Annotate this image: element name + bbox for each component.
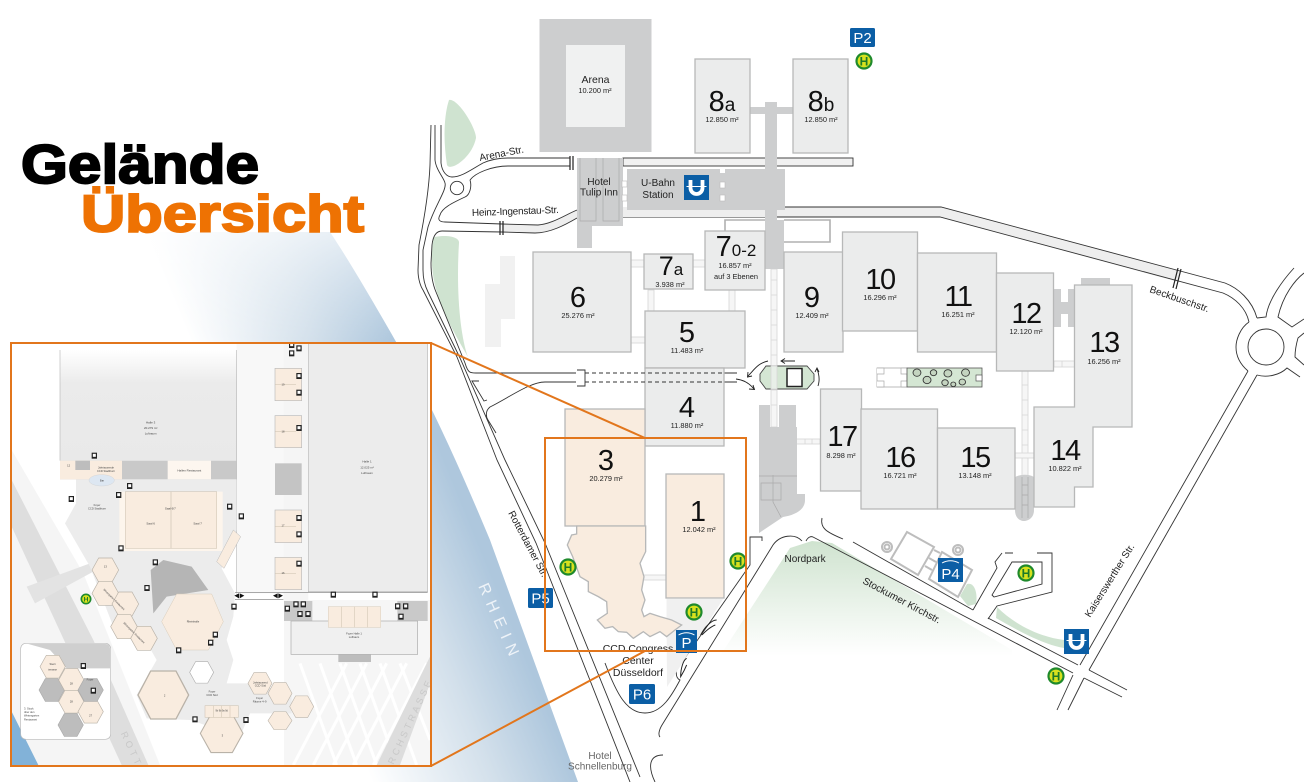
- inset: bus stop: [81, 594, 91, 604]
- west roundabout: [450, 181, 464, 195]
- horizontal connector 8a 8b: [750, 107, 793, 114]
- title line: Übersicht: Übersicht: [81, 186, 364, 244]
- hall 13 and 14: 13: [1089, 327, 1119, 359]
- roundabout plaza with arrows: [736, 358, 819, 390]
- inset: upper floor box: [21, 643, 111, 739]
- hall 7a: [644, 251, 693, 289]
- bus stop icons: [560, 54, 1064, 684]
- hall 17: [820, 389, 862, 491]
- gray parking frame P4: [882, 532, 972, 597]
- river label: RHEIN: [474, 581, 524, 665]
- inset: hall 1: [308, 343, 428, 592]
- inset: Saal 6 and 7: Saal 6/7: [165, 506, 176, 510]
- U-Bahn station block: [627, 169, 785, 210]
- inset: seminar labels: CCD Süd: [255, 684, 266, 688]
- south loop: [605, 537, 762, 713]
- hall 6: [533, 252, 631, 352]
- caption CCD Congress Center: Center: [622, 655, 654, 667]
- inset: hall 3: [60, 350, 237, 593]
- inset: side modules of hall 1: [275, 368, 302, 590]
- parking sign garage: P: [681, 635, 692, 652]
- park Nordpark: [720, 541, 1012, 656]
- inset: upper floor box: Restaurant: [24, 717, 37, 721]
- road break marks: [500, 156, 1181, 289]
- Stockumer lines: [806, 537, 1073, 673]
- hall 4: 4: [679, 392, 695, 424]
- hall 8a: 12.850 m²: [705, 115, 739, 124]
- inset: corridor: [234, 592, 428, 599]
- inset: small seminar row: [217, 530, 241, 568]
- hall 1: 1: [690, 496, 706, 528]
- Arena-Str lines: [441, 125, 570, 177]
- inset: side modules of hall 1: 16: [282, 571, 285, 575]
- inset: seminar labels: Wintergarten Restaurant: [122, 621, 146, 644]
- street labels: [472, 145, 1210, 772]
- inset: restaurant strip: CCD Stadthorn: [97, 469, 116, 473]
- hall 17: 17: [827, 421, 857, 453]
- connector 12 13: [1054, 289, 1075, 327]
- inset: upper floor box: terasse: [48, 668, 58, 672]
- hall 8a: [695, 59, 750, 153]
- inset: foyer hall 1: [284, 601, 428, 662]
- inset: hall 1: Halle 1: [362, 459, 372, 463]
- callout frame around congress center: [545, 438, 746, 651]
- hall 7 0-2: 16.857 m²: [718, 261, 752, 270]
- dashed tunnel lines: [585, 373, 723, 382]
- gray hub and connector structures: [577, 102, 1110, 533]
- hall 11: 11: [944, 281, 972, 313]
- label Rotterdamer Str: Rotterdamer Str.: [505, 509, 550, 579]
- inset: hall 1: Luftraum: [361, 471, 373, 475]
- inset: side modules of hall 1: 18: [282, 430, 285, 434]
- hall 10: 10: [865, 264, 895, 296]
- hall Arena: Arena: [581, 74, 610, 86]
- Kaiserswerther lines: [1080, 371, 1248, 665]
- station caption: U-Bahn: [641, 178, 675, 189]
- hall 8b: [793, 59, 848, 153]
- inset: hall 3: Luftraum: [145, 432, 157, 436]
- hall 15: 15: [960, 442, 990, 474]
- hall 7a: 7a: [659, 251, 684, 281]
- inset: upper floor box: 28: [70, 682, 73, 686]
- inset: upper floor box: 28: [70, 700, 73, 704]
- hall 9: [784, 252, 843, 352]
- inset: restaurant strip: [60, 461, 237, 479]
- east roundabout: [1248, 329, 1284, 365]
- parking sign P2: P2: [853, 30, 872, 47]
- inset: seminar labels: Foyer: [256, 697, 263, 700]
- inset: upper floor box: 3. Stock: [24, 706, 34, 710]
- label Arena-Str: Arena-Str.: [478, 145, 525, 164]
- hotel caption: Tulip Inn: [580, 188, 618, 198]
- hall 7 0-2: auf 3 Ebenen: [714, 272, 758, 281]
- parking sign P5: [528, 588, 553, 608]
- parking sign garage: [676, 630, 697, 653]
- garage arrows: [681, 620, 717, 677]
- hall 8b: 12.850 m²: [804, 115, 838, 124]
- hall 8b: 8b: [808, 86, 834, 118]
- hall 3: 20.279 m²: [589, 474, 623, 483]
- hall 9: 12.409 m²: [795, 311, 829, 320]
- inset: foyer label: CCD Stadthorn: [88, 506, 107, 510]
- inset: seminar labels: [102, 564, 268, 738]
- label Beckbuschstr: Beckbuschstr.: [1148, 284, 1210, 315]
- label Heinz-Ingenstau-Str: Heinz-Ingenstau-Str.: [472, 205, 559, 219]
- hall 10: 16.296 m²: [863, 293, 897, 302]
- Heinz-Ingenstau lower line: [431, 218, 577, 373]
- parking sign P2: [850, 28, 875, 47]
- hall 16: 16: [885, 442, 915, 474]
- inset: auditorium: Rheinhalle: [187, 620, 200, 624]
- inset: restaurant strip: Hallen Restaurant: [177, 468, 201, 472]
- inset: upper floor box: Stern: [49, 662, 56, 666]
- hall 3: [565, 409, 645, 526]
- inset: seminar labels: Foyer: [209, 691, 215, 694]
- icon: U-Bahn Kaiserswerther: [1064, 629, 1089, 654]
- hall 7a: 3.938 m²: [655, 280, 685, 289]
- south entrance block: [759, 405, 805, 533]
- title: [21, 133, 364, 244]
- road network: [418, 125, 1304, 782]
- inset: side modules of hall 1: 17: [282, 524, 285, 528]
- inset: hall 3: Halle 3: [146, 420, 156, 424]
- hall 13 and 14: 10.822 m²: [1048, 464, 1082, 473]
- inset: seminar labels: Wintergarten Restaurant: [102, 588, 126, 611]
- inset: foyer hall 1: Foyer Halle 1: [346, 633, 362, 636]
- bus stop icons: H: [860, 54, 868, 68]
- inset: seminar hexagons: [92, 558, 314, 753]
- top bump hall 13: [1081, 278, 1110, 286]
- parking sign P4: P4: [941, 566, 960, 583]
- inset: rooms row: [205, 706, 238, 717]
- inset: upper floor box: Wintergarten: [24, 714, 40, 718]
- hall 10: [842, 232, 918, 331]
- inset: seminar labels: Räume 4–9: [253, 699, 267, 703]
- inset: foyer floor: [65, 479, 292, 737]
- inset: hall 1: 12.025 m²: [360, 465, 374, 469]
- hall 5: [645, 311, 745, 368]
- bus stop icons: H: [690, 605, 698, 619]
- parking sign P6: P6: [633, 686, 651, 704]
- label Kaiserswerther Str: Kaiserswerther Str.: [1083, 542, 1137, 620]
- bus stop icons: H: [564, 560, 572, 574]
- hall 13 and 14: 14: [1050, 435, 1081, 467]
- hall 11: 16.251 m²: [941, 310, 975, 319]
- road Heinz-Ingenstau fill: [502, 210, 577, 233]
- hall Arena: 10.200 m²: [578, 86, 612, 95]
- gray forecourt triangle: [666, 599, 723, 687]
- station caption: Station: [642, 190, 674, 201]
- inset: road and river background: [12, 343, 435, 782]
- inset: restaurant strip: 12: [67, 464, 71, 468]
- road Arena-Str east: [623, 158, 853, 166]
- hall 6: 6: [570, 282, 586, 314]
- inset: upper floor box: Foyer: [87, 678, 94, 682]
- caption CCD Congress Center: Düsseldorf: [613, 667, 663, 679]
- Heinz-Ingenstau upper line: [439, 180, 577, 225]
- inset: bus stop: H: [84, 597, 89, 604]
- callout connector lines: [431, 343, 645, 766]
- bus stop icons: H: [1052, 669, 1060, 683]
- hall 12: 12.120 m²: [1009, 327, 1043, 336]
- bus stop icons: H: [734, 554, 742, 568]
- inset: seminar labels: 3: [222, 734, 224, 738]
- hotel Tulip Inn block: [577, 158, 623, 248]
- hall 12: 12: [1011, 298, 1041, 330]
- side parking road: [973, 553, 1002, 610]
- hall 11: [918, 253, 996, 352]
- inset: restaurant strip: Jahrtausende: [98, 465, 115, 469]
- hall 7 0-2: 70-2: [716, 231, 756, 263]
- inset: road lettering east: RCHSTRASSE: [386, 677, 435, 766]
- inset: seminar labels: 2: [164, 694, 166, 698]
- vertical concourse: [765, 102, 784, 269]
- hall 12: [996, 273, 1054, 371]
- icon: U-Bahn station: [684, 175, 709, 200]
- inset: seminar labels: CCD Süd: [206, 693, 218, 697]
- hall 16: [861, 409, 938, 509]
- congress center shape: [567, 526, 682, 638]
- walkways: [631, 260, 1075, 580]
- hall 7 0-2: [705, 231, 765, 290]
- hall 15: [938, 428, 1015, 509]
- hall 1: [666, 474, 724, 598]
- inset: auditorium: [151, 560, 223, 650]
- inset: hall 3: 20.279 m²: [144, 426, 157, 430]
- hall 8a: 8a: [709, 86, 736, 118]
- hall 9: 9: [804, 282, 820, 314]
- inset: Saal 6 and 7: Saal 7: [193, 521, 202, 525]
- inset: rooms row: 9b 9b 9a 9d: [216, 711, 229, 713]
- green areas: [432, 100, 1064, 648]
- inset: side modules of hall 1: 19: [282, 382, 285, 386]
- bus stop icons: H: [1022, 566, 1030, 580]
- garden with trees: [877, 368, 982, 387]
- hall 13 and 14: [1034, 285, 1132, 507]
- inset: bar: Bar: [100, 478, 104, 482]
- hall 17: 8.298 m²: [826, 451, 856, 460]
- pale building shape west: [485, 256, 515, 347]
- inset floor plan: [11, 342, 435, 782]
- service road: [486, 382, 576, 433]
- hall 15: 13.148 m²: [958, 471, 992, 480]
- inset: Saal 6 and 7: Saal 6: [146, 521, 155, 525]
- inset frame: [11, 343, 431, 766]
- road Beckbuschstr: [623, 207, 1249, 320]
- hall 13 and 14: 16.256 m²: [1087, 357, 1121, 366]
- river Rhein: [150, 232, 578, 782]
- hall 4: 11.880 m²: [671, 421, 704, 430]
- hall 1: 12.042 m²: [682, 525, 716, 534]
- hall 16: 16.721 m²: [883, 471, 917, 480]
- caption CCD Congress Center: CCD Congress: [603, 643, 673, 655]
- inset: upper floor box: 27: [89, 714, 93, 718]
- inset: foyer hall 1: Luftraum: [349, 635, 360, 639]
- hall 5: 11.483 m²: [671, 346, 704, 355]
- inset: upper floor box: über den: [24, 710, 35, 714]
- inset: foyer label: Foyer: [94, 504, 100, 507]
- parking sign P5: P5: [531, 590, 550, 608]
- label Hotel Schnellenburg: Schnellenburg: [568, 762, 632, 772]
- label Stockumer Kirchstr: Stockumer Kirchstr.: [861, 576, 942, 626]
- label Nordpark: Nordpark: [784, 554, 827, 565]
- capsule block: [1015, 475, 1034, 521]
- hotel caption: Hotel: [587, 177, 611, 188]
- title line: Gelände: Gelände: [21, 133, 259, 195]
- hall 5: 5: [679, 317, 695, 349]
- inset: seminar labels: Jahrtausend: [253, 681, 268, 684]
- Rotterdamer inner line: [423, 125, 640, 777]
- inset: bar: [89, 475, 114, 486]
- inset: seminar labels: 13: [104, 564, 107, 568]
- hall 6: 25.276 m²: [561, 311, 595, 320]
- hall 4: [645, 368, 724, 446]
- parking sign P6: [629, 684, 655, 704]
- label Hotel Schnellenburg: Hotel: [588, 751, 612, 762]
- hall Arena: [540, 19, 652, 152]
- Rotterdamer outer line: [418, 125, 630, 782]
- band below station: [623, 210, 765, 217]
- parking sign P4: [938, 558, 963, 583]
- inset: service icons: [69, 342, 408, 723]
- inset: Saal 6 and 7: [119, 492, 223, 551]
- hall 3: 3: [598, 445, 614, 477]
